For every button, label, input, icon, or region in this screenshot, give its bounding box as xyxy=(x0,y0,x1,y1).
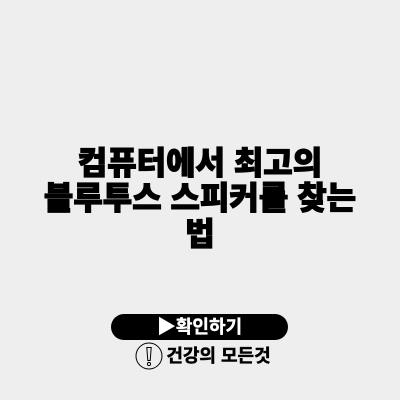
button: confirm xyxy=(111,314,288,340)
title: 컴퓨터에서 최고의 xyxy=(78,145,322,181)
button: confirm: ▶확인하기 xyxy=(157,317,242,338)
brand label: 건강의 모든것 xyxy=(166,346,271,366)
title: 블루투스 스피커를 찾는 xyxy=(44,180,356,216)
icon: exclamation circle xyxy=(136,342,162,370)
title: 법 xyxy=(185,216,215,252)
title xyxy=(44,145,356,252)
